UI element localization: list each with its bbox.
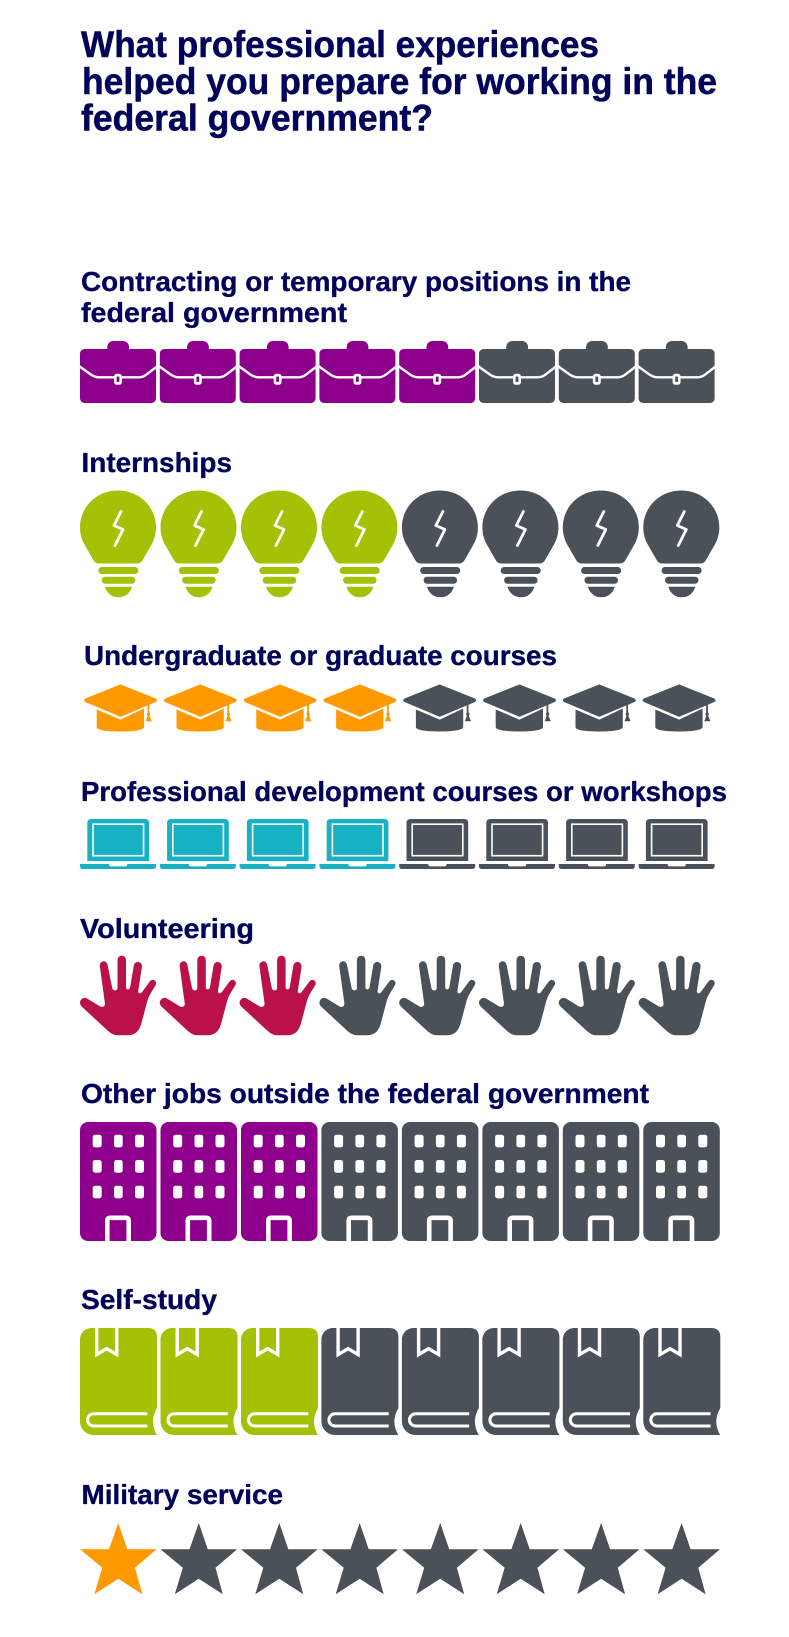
icon row: laptops, 4 of 8 highlighted	[80, 819, 715, 869]
panel: self-study	[80, 1284, 720, 1435]
panel: internships	[80, 447, 719, 597]
heading: undergraduate: Undergraduate or graduate courses	[84, 640, 557, 671]
heading: other jobs: Other jobs outside the federal government	[81, 1078, 649, 1109]
icon row: hands, 3 of 8 highlighted	[81, 956, 714, 1035]
heading: contracting: Contracting or temporary positions in the	[81, 266, 631, 297]
heading: contracting: federal government	[81, 297, 347, 328]
icon row: graduation caps, 4 of 8 highlighted	[84, 685, 715, 732]
icon row: briefcases, 5 of 8 highlighted	[79, 341, 716, 403]
icon row: light bulbs, 4 of 8 highlighted	[80, 490, 719, 597]
panel: professional development courses	[80, 776, 727, 869]
heading: self-study: Self-study	[81, 1284, 217, 1315]
heading: contracting	[81, 266, 631, 328]
panel: contracting or temporary positions	[79, 266, 716, 403]
heading: volunteering: Volunteering	[80, 913, 254, 944]
title: helped you prepare for working in the	[82, 60, 717, 102]
icon row: stars, 1 of 8 highlighted	[80, 1523, 720, 1594]
panel: undergraduate or graduate courses	[84, 640, 715, 732]
heading: professional development: Professional development courses or workshops	[81, 776, 727, 807]
title	[81, 23, 717, 138]
icon row: books, 3 of 8 highlighted	[80, 1327, 720, 1435]
panel: military service	[80, 1479, 720, 1594]
heading: internships: Internships	[82, 447, 232, 478]
title: federal government?	[81, 96, 433, 138]
panel: volunteering	[80, 913, 714, 1035]
panel: other jobs	[80, 1078, 720, 1241]
title: What professional experiences	[81, 23, 599, 65]
heading: military service: Military service	[82, 1479, 283, 1510]
icon row: office buildings, 3 of 8 highlighted	[80, 1122, 720, 1241]
